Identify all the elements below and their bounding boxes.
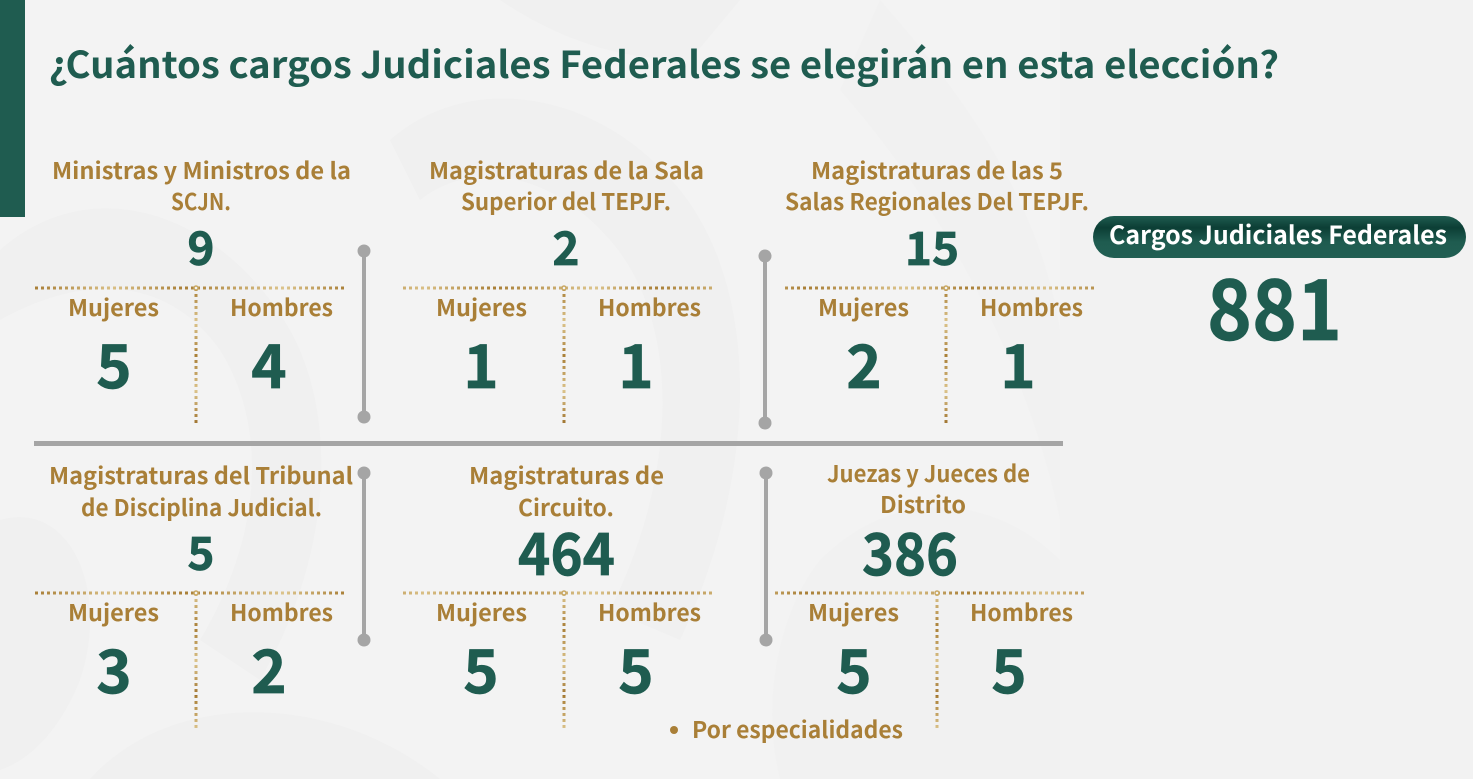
values: [96, 319, 287, 406]
panel: Ministras y Ministros: [35, 152, 351, 424]
separator: [358, 244, 370, 424]
total 15: 15: [905, 213, 959, 279]
values: [463, 319, 654, 406]
divider lines: [403, 591, 714, 729]
title: ¿Cuántos cargos Judiciales Federales se elegirán en esta elección?: [49, 35, 1279, 89]
values: [846, 319, 1036, 406]
values: 5: [836, 624, 872, 711]
heading: Juezas y Jueces: Distrito: [880, 486, 966, 520]
pill: Cargos Judiciales Federales: Cargos Judiciales Federales: [1109, 216, 1447, 252]
labels: Hombres: [230, 289, 333, 323]
note: Por especialidades: Por especialidades: [692, 711, 903, 745]
separator: [358, 466, 370, 646]
labels: Hombres: [230, 594, 333, 628]
values: 3: [96, 624, 132, 711]
labels: Mujeres: [68, 594, 159, 628]
total 881: 881: [1207, 244, 1342, 365]
panel: Juezas y Jueces: [775, 455, 1086, 729]
labels: [436, 289, 701, 323]
values: 5: [463, 624, 499, 711]
heading: Sala Superior: Superior del TEPJF.: [461, 183, 671, 217]
divider lines: [785, 286, 1096, 424]
values: [96, 624, 287, 711]
panel: Circuito: [403, 457, 714, 729]
values: 5: [96, 319, 132, 406]
separator: [760, 466, 772, 646]
labels: Hombres: [980, 289, 1083, 323]
divider lines: [775, 591, 1086, 729]
total 5: 5: [187, 518, 215, 584]
labels: Hombres: [598, 289, 701, 323]
divider lines: [403, 286, 714, 424]
total 9: 9: [187, 213, 215, 279]
heading: Tribunal de Disciplina: de Disciplina Judicial.: [81, 489, 322, 523]
labels: Mujeres: [436, 594, 527, 628]
panel: Salas Regionales: [785, 152, 1096, 424]
panel: Tribunal de Disciplina: [35, 457, 353, 729]
heading: Sala Superior: Magistraturas de la Sala: [429, 152, 704, 186]
separator: [758, 250, 772, 430]
total 464: 464: [518, 508, 615, 592]
labels: [808, 594, 1073, 628]
horizontal separator: [34, 441, 1063, 446]
heading: Circuito: Circuito.: [518, 489, 614, 523]
heading: Circuito: Magistraturas de: [469, 457, 664, 491]
divider lines: [35, 591, 346, 729]
labels: [818, 289, 1083, 323]
values: 1: [618, 319, 654, 406]
values: 1: [1000, 319, 1036, 406]
heading: Ministras y Ministros: SCJN.: [171, 183, 231, 217]
labels: Hombres: [598, 594, 701, 628]
labels: [68, 594, 333, 628]
values: 5: [991, 624, 1027, 711]
values: 4: [251, 319, 287, 406]
values: 2: [846, 319, 882, 406]
labels: [436, 594, 701, 628]
total 2: 2: [552, 213, 580, 279]
heading: Ministras y Ministros: Ministras y Ministros de la: [52, 152, 351, 186]
labels: Mujeres: [68, 289, 159, 323]
values: 2: [251, 624, 287, 711]
total 386: 386: [862, 508, 958, 592]
labels: Mujeres: [436, 289, 527, 323]
values: [463, 624, 654, 711]
labels: Mujeres: [818, 289, 909, 323]
labels: [68, 289, 333, 323]
values: 1: [463, 319, 499, 406]
left accent bar: [0, 0, 25, 217]
labels: Hombres: [970, 594, 1073, 628]
heading: Salas Regionales: Salas Regionales Del TEPJF.: [785, 183, 1089, 217]
labels: Mujeres: [808, 594, 899, 628]
panel: Sala Superior: [403, 152, 714, 424]
divider lines: [35, 286, 346, 424]
heading: Juezas y Jueces: Juezas y Jueces de: [827, 455, 1030, 489]
heading: Salas Regionales: Magistraturas de las 5: [811, 152, 1063, 186]
values: [836, 624, 1027, 711]
heading: Tribunal de Disciplina: Magistraturas del Tribunal: [49, 457, 353, 491]
values: 5: [618, 624, 654, 711]
